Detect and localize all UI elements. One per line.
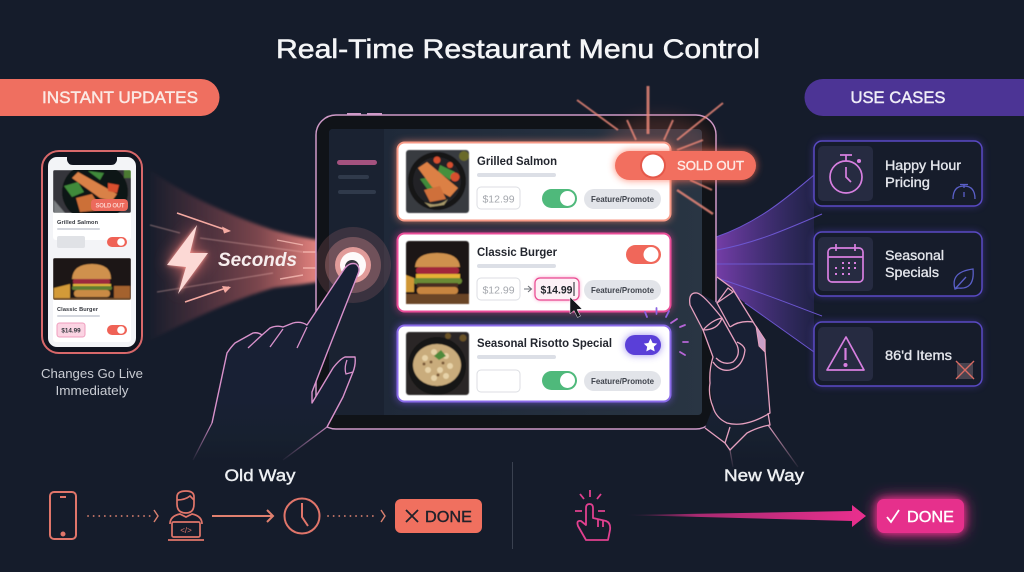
use case: seasonal specials: Specials: [885, 264, 939, 280]
icon: developer at laptop: </>: [180, 526, 192, 535]
star sparkle marks: [645, 308, 688, 355]
new way heading: New Way: [724, 467, 805, 485]
solid arrow: [212, 510, 273, 522]
touch ripple: [315, 227, 391, 303]
use case: seasonal specials: [814, 232, 982, 296]
price arrow: [524, 286, 532, 292]
phone: [41, 151, 143, 353]
menu card: seasonal risotto special: Feature/Promote: [591, 377, 654, 386]
heading: instant updates: INSTANT UPDATES: [42, 88, 198, 107]
menu card: grilled salmon: [397, 142, 671, 221]
new price field: $14.99: [540, 284, 572, 296]
menu card: seasonal risotto special: [397, 325, 671, 402]
icon: calendar: [828, 244, 863, 282]
label: seconds: Seconds: [218, 250, 297, 271]
menu card: grilled salmon: Grilled Salmon: [477, 154, 557, 168]
phone card: grilled salmon: Grilled Salmon: [57, 220, 99, 226]
heading: use cases: USE CASES: [850, 88, 946, 107]
tablet: [316, 113, 716, 429]
x done badge: DONE: [425, 509, 472, 526]
use case: 86'd items: 86'd Items: [885, 347, 952, 363]
phone caption: Changes Go Live: [41, 367, 143, 381]
phone card: grilled salmon: SOLD OUT: [96, 204, 125, 210]
phone caption: [41, 367, 143, 398]
menu card: grilled salmon: Feature/Promote: [591, 195, 654, 204]
dotted arrow: [328, 510, 385, 522]
icon: warning triangle: [827, 337, 864, 370]
icon: clock: [284, 498, 320, 534]
sold out toggle: [615, 151, 756, 180]
speed beam from phone to tablet: [147, 167, 318, 342]
x done badge: [395, 499, 482, 533]
dotted arrow: [88, 510, 158, 522]
icon: lightning bolt: [167, 225, 208, 294]
sold out toggle: SOLD OUT: [677, 159, 744, 173]
phone caption: Immediately: [56, 384, 129, 398]
heading: use cases: [805, 79, 1024, 116]
use case: seasonal specials: Seasonal: [885, 247, 944, 263]
icon: stopwatch: [830, 155, 862, 193]
heading: instant updates: [0, 79, 220, 116]
use case beams: [716, 175, 822, 352]
icon: smartphone: [50, 492, 76, 539]
menu card: grilled salmon: $12.99: [482, 194, 515, 206]
use case: happy hour pricing: Pricing: [885, 174, 930, 190]
old way flow: [50, 491, 482, 540]
icon: tapping hand: [575, 490, 610, 540]
title: Real-Time Restaurant Menu Control: [276, 34, 760, 64]
old way heading: Old Way: [224, 467, 296, 485]
mini crossed-out icon: [956, 361, 974, 379]
sold out burst: [577, 86, 723, 214]
divider: [512, 462, 513, 549]
phone card: grilled salmon: [53, 162, 131, 248]
use case: happy hour pricing: Happy Hour: [885, 157, 961, 173]
fast arrow: [625, 505, 866, 527]
new price field: [535, 278, 579, 300]
icon: mouse cursor: [570, 297, 582, 318]
left hand: [193, 264, 359, 460]
menu card: classic burger: [397, 233, 671, 312]
right hand: [690, 277, 798, 467]
icon: developer at laptop: [168, 491, 204, 540]
menu card: classic burger: Classic Burger: [477, 245, 557, 259]
menu card: classic burger: $12.99: [482, 284, 515, 296]
done badge: DONE: [907, 509, 954, 526]
phone card: classic burger: Classic Burger: [57, 307, 99, 313]
tablet sidebar: [329, 129, 384, 415]
food photo: risotto: [406, 332, 469, 395]
use case: happy hour pricing: [814, 141, 982, 206]
done badge: [877, 499, 964, 533]
new way flow: [575, 490, 964, 540]
phone card: classic burger: [53, 258, 131, 342]
mini timer icon: [953, 184, 975, 199]
star toggle: [625, 335, 661, 355]
food photo: salmon: [406, 150, 469, 213]
phone card: classic burger: $14.99: [61, 328, 81, 334]
mini leaf icon: [954, 269, 973, 289]
menu card: seasonal risotto special: Seasonal Risotto Special: [477, 336, 612, 350]
menu card: classic burger: Feature/Promote: [591, 286, 654, 295]
food photo: burger: [406, 241, 469, 304]
use case: 86'd items: [814, 322, 982, 386]
